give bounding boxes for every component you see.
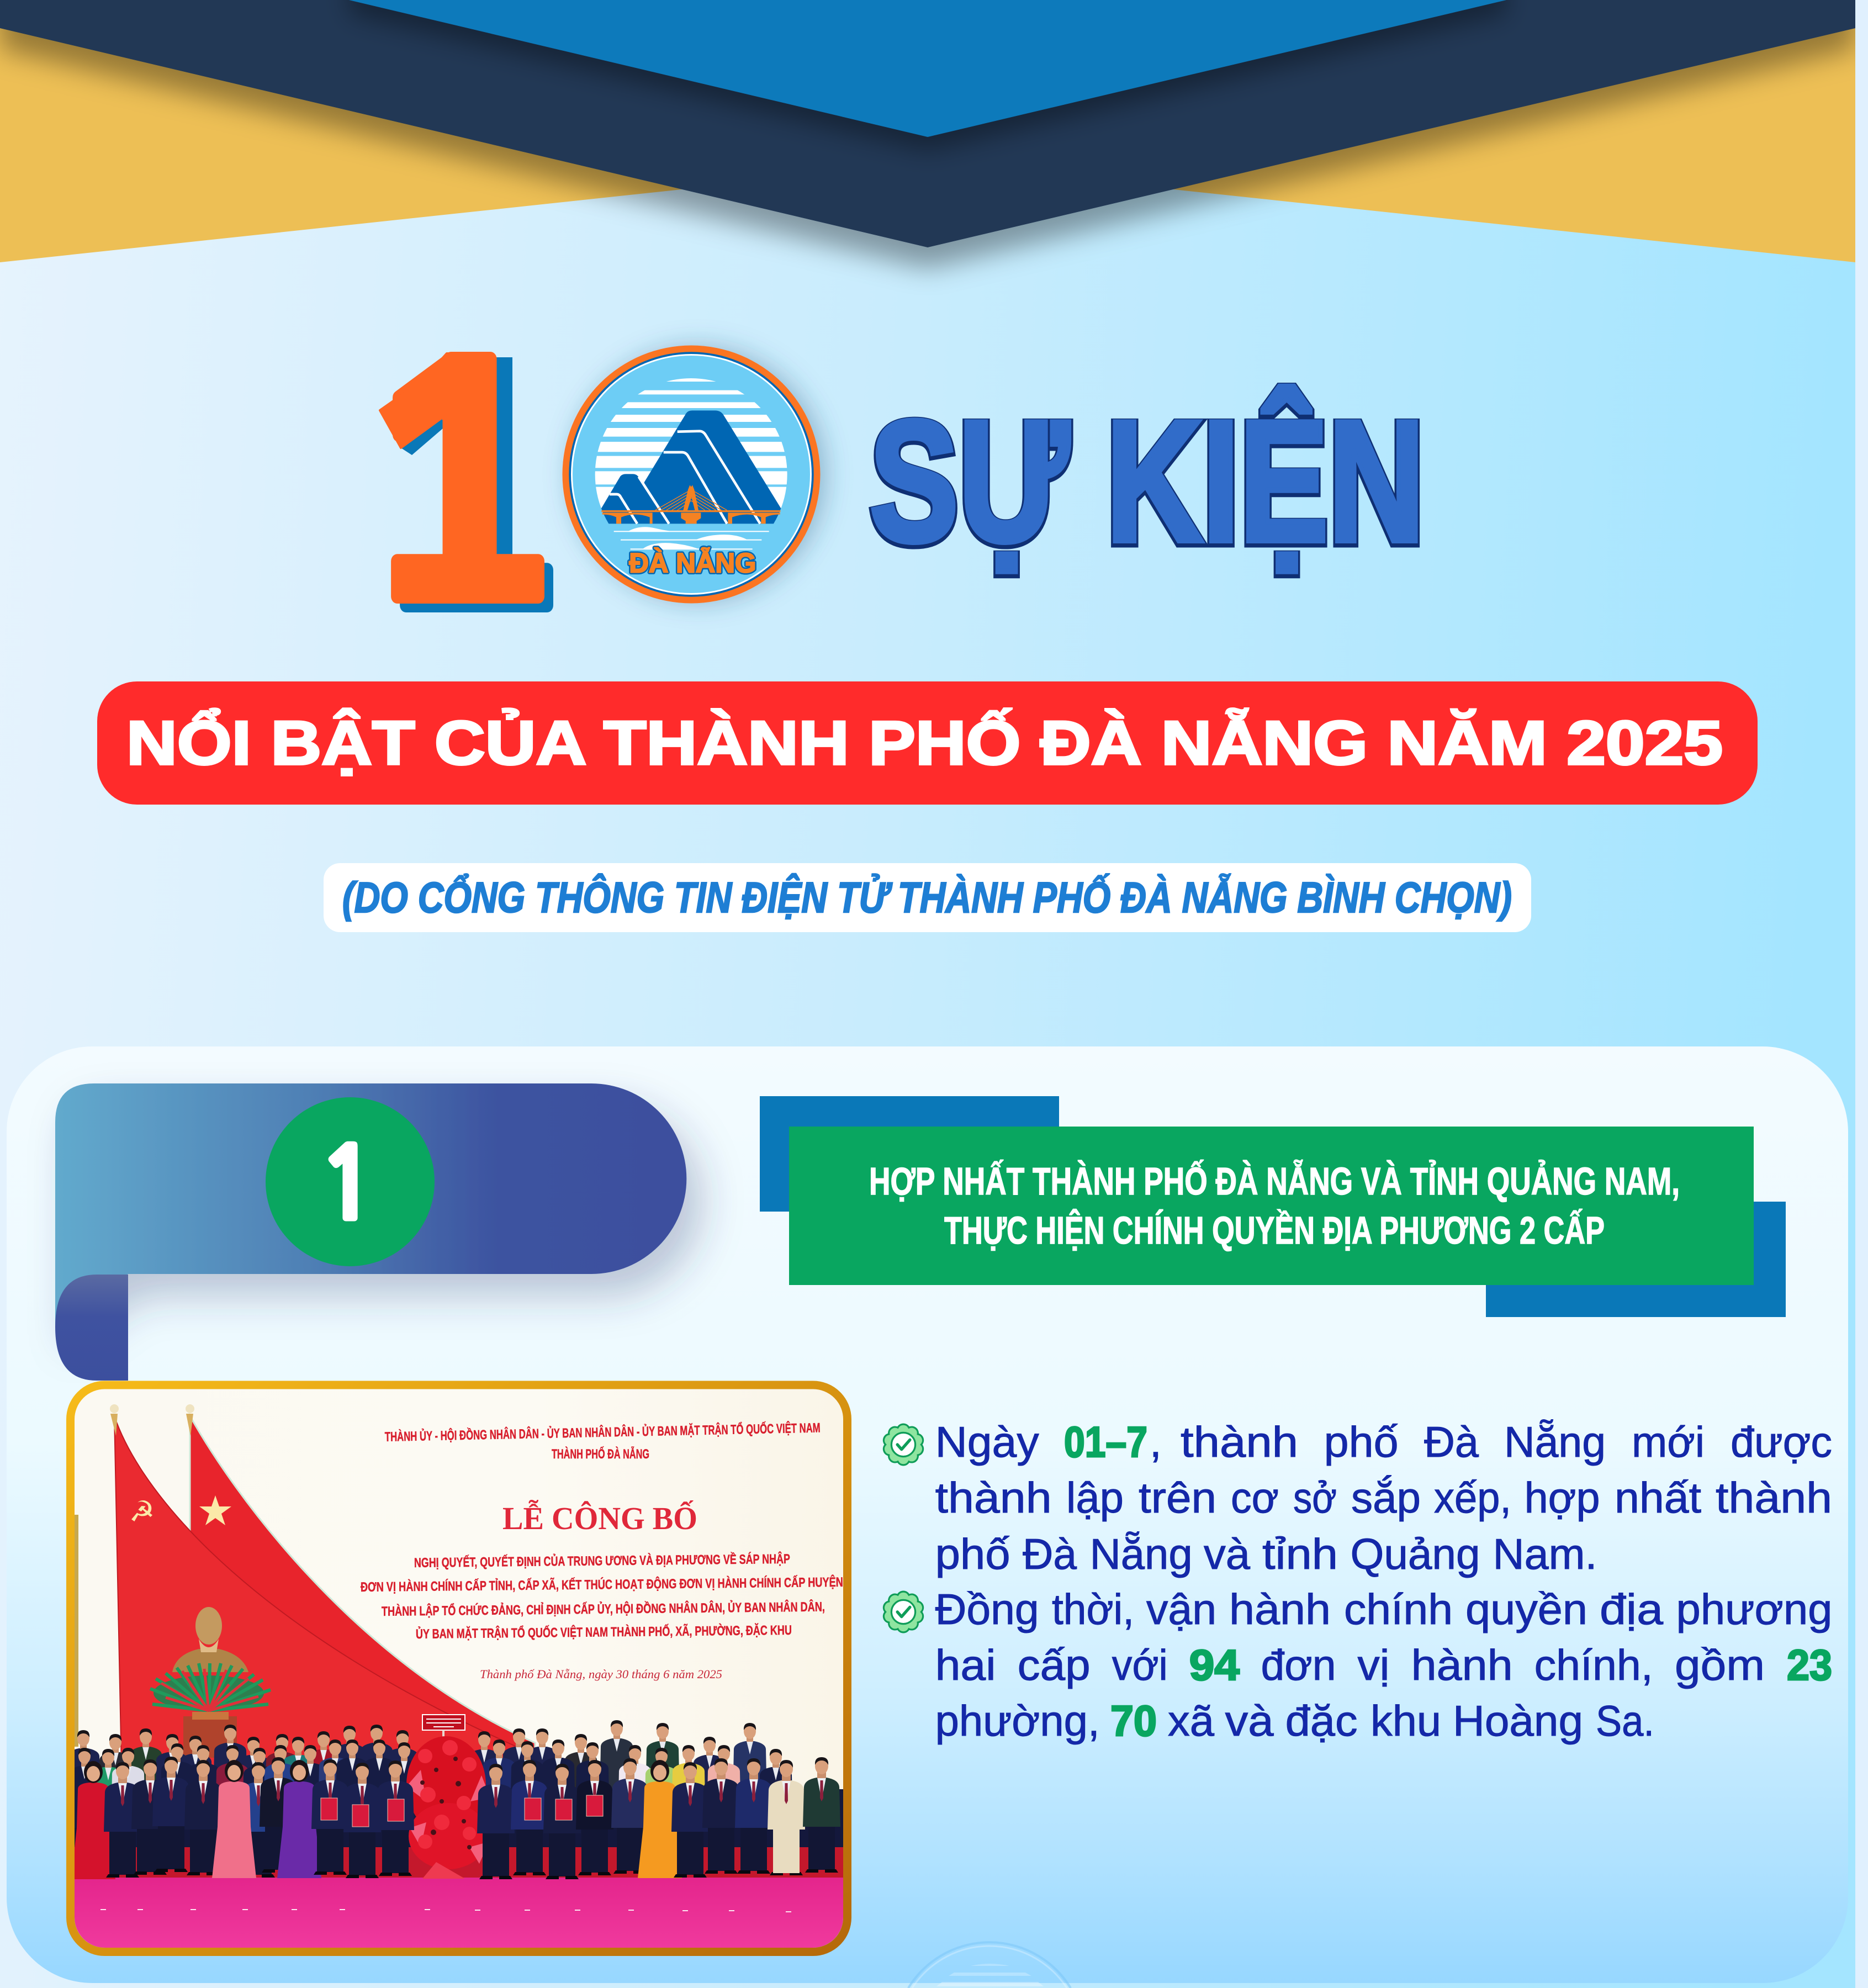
- line 4: [935, 1585, 1832, 1633]
- ceremony line 2: ĐƠN VỊ HÀNH CHÍNH CẤP TỈNH, CẤP XÃ, KẾT THÚC HOẠT ĐỘNG ĐƠN VỊ HÀNH CHÍNH CẤP HUYỆN: [361, 1574, 843, 1595]
- line 6: Hoàng: [1453, 1696, 1583, 1745]
- line 3: [935, 1530, 1597, 1578]
- line 3: Đà: [1023, 1530, 1077, 1578]
- ceremony line 3: THÀNH LẬP TỔ CHỨC ĐẢNG, CHỈ ĐỊNH CẤP ỦY, HỘI ĐỒNG NHÂN DÂN, ỦY BAN NHÂN DÂN,: [382, 1599, 825, 1619]
- line 6: 70: [1110, 1696, 1157, 1745]
- gold band right: [1137, 22, 1855, 262]
- number one flag depth: [401, 418, 443, 455]
- line 6: đặc: [1285, 1696, 1358, 1745]
- number one stem depth: [491, 357, 512, 578]
- line 2: xếp,: [1434, 1473, 1511, 1522]
- flag front: [114, 1416, 519, 1822]
- line 1: Đà: [1424, 1418, 1479, 1466]
- line 4: phương: [1676, 1585, 1832, 1633]
- line 6: [935, 1696, 1654, 1745]
- gold band left: [0, 22, 718, 262]
- line 6: phường,: [935, 1696, 1100, 1745]
- ceremony date: Thành phố Đà Nẵng, ngày 30 tháng 6 năm 2025: [480, 1667, 722, 1681]
- line 5: gồm: [1675, 1641, 1765, 1689]
- headline text: NỔI BẬT CỦA THÀNH PHỐ ĐÀ NẴNG NĂM 2025: [126, 709, 1723, 778]
- line 1: [935, 1418, 1832, 1466]
- heading line 2: THỰC HIỆN CHÍNH QUYỀN ĐỊA PHƯƠNG 2 CẤP: [944, 1208, 1605, 1252]
- bust statue: [172, 1607, 248, 1672]
- line 5: chính,: [1534, 1641, 1653, 1689]
- curtain pole: [75, 1515, 78, 1747]
- watermark logo at bottom: [908, 1942, 1071, 1988]
- subtitle text: (DO CỔNG THÔNG TIN ĐIỆN TỬ THÀNH PHỐ ĐÀ NẴNG BÌNH CHỌN): [342, 873, 1512, 922]
- banner sign: [422, 1715, 465, 1738]
- line 6: Sa.: [1596, 1696, 1654, 1745]
- line 2: [935, 1473, 1832, 1522]
- stage steps: [75, 1847, 843, 1879]
- number one face: 1: [378, 284, 547, 670]
- number circle: [266, 1097, 435, 1266]
- stage backdrop: [75, 1389, 843, 1886]
- bullet icon 1: [883, 1424, 923, 1465]
- bullet paragraph 2: [935, 1585, 1832, 1745]
- line 5: vị: [1357, 1641, 1389, 1689]
- blue chevron: [349, 0, 1506, 137]
- red headline banner: [97, 681, 1758, 805]
- flag star: [199, 1495, 231, 1525]
- army officer: [803, 1757, 840, 1873]
- line 5: 94: [1189, 1641, 1240, 1689]
- title outline: SỰ KIỆN: [870, 386, 1425, 579]
- line 2: thành: [1716, 1473, 1832, 1522]
- number: 1: [317, 1135, 378, 1234]
- line 4: địa: [1600, 1585, 1664, 1633]
- flower arrangement: [406, 1736, 490, 1879]
- flag back: [190, 1416, 535, 1822]
- ceremony line 1: NGHỊ QUYẾT, QUYẾT ĐỊNH CỦA TRUNG ƯƠNG VÀ ĐỊA PHƯƠNG VỀ SÁP NHẬP: [414, 1551, 790, 1571]
- back row of delegates: [66, 1720, 767, 1817]
- navy chevron: [0, 0, 1855, 247]
- line 1: mới: [1632, 1418, 1705, 1466]
- green heading panel: [789, 1127, 1754, 1285]
- line 3: Nam.: [1493, 1530, 1597, 1578]
- header text line 1: THÀNH ỦY - HỘI ĐỒNG NHÂN DÂN - ỦY BAN NHÂN DÂN - ỦY BAN MẶT TRẬN TỔ QUỐC VIỆT NAM: [385, 1419, 821, 1445]
- line 1: ,: [1150, 1418, 1162, 1466]
- logo ring blue: [569, 352, 814, 597]
- photo contents: [66, 1389, 843, 1949]
- line 6: khu: [1370, 1696, 1441, 1745]
- wordmark outline: ĐÀ NẴNG: [629, 548, 756, 579]
- number one depth shadow: 1: [387, 293, 555, 679]
- line 1: Ngày: [935, 1418, 1039, 1466]
- bullet icon 2: [883, 1592, 923, 1632]
- logo artwork: [589, 378, 791, 579]
- logo ring orange: [562, 346, 821, 603]
- line 2: cơ: [1231, 1473, 1279, 1522]
- flower planter: [150, 1663, 271, 1758]
- logo wordmark: [629, 548, 756, 579]
- line 1: Nẵng: [1504, 1418, 1606, 1466]
- river waves: [614, 527, 769, 549]
- panel card: [7, 1046, 1848, 1983]
- header text line 2: THÀNH PHỐ ĐÀ NẴNG: [552, 1446, 649, 1462]
- line 3: Quảng: [1351, 1530, 1480, 1578]
- pink carpet: [75, 1878, 843, 1949]
- line 4: vận: [1146, 1585, 1216, 1633]
- event heading box: [760, 1096, 1786, 1317]
- line 2: sở: [1293, 1473, 1337, 1522]
- title face: SỰ KIỆN: [870, 384, 1425, 578]
- bullet paragraph 1: [935, 1418, 1832, 1578]
- line 1: phố: [1324, 1418, 1399, 1466]
- line 2: trên: [1139, 1473, 1216, 1522]
- ceremony title: LỄ CÔNG BỐ: [502, 1500, 697, 1536]
- front row of delegates: [71, 1757, 840, 1879]
- sun stripes: [589, 378, 791, 508]
- line 1: thành: [1181, 1418, 1298, 1466]
- panel: event 1: [7, 1046, 1848, 1983]
- carpet highlights: [100, 1909, 791, 1912]
- line 5: đơn: [1261, 1641, 1336, 1689]
- crowd dark underlay: [75, 1789, 843, 1847]
- big number one: [378, 284, 555, 679]
- line 5: 23: [1787, 1641, 1832, 1689]
- line 4: quyền: [1465, 1585, 1587, 1633]
- line 5: với: [1112, 1641, 1168, 1689]
- photo frame: [66, 1385, 847, 1952]
- flag finials: [110, 1404, 194, 1436]
- wordmark face: ĐÀ NẴNG: [629, 548, 756, 579]
- ceremony line 4: ỦY BAN MẶT TRẬN TỔ QUỐC VIỆT NAM THÀNH PHỐ, XÃ, PHƯỜNG, ĐẶC KHU: [416, 1622, 792, 1642]
- ribbon roll: [55, 1275, 128, 1381]
- line 5: cấp: [1018, 1641, 1091, 1689]
- logo ring white: [571, 354, 812, 595]
- bridge: [601, 485, 780, 524]
- line 2: lập: [1066, 1473, 1124, 1522]
- police officer: [768, 1760, 805, 1875]
- line 5: hành: [1411, 1641, 1513, 1689]
- line 4: chính: [1344, 1585, 1453, 1633]
- line 2: nhất: [1615, 1473, 1701, 1522]
- line 4: Đồng: [935, 1585, 1039, 1633]
- line 5: hai: [935, 1641, 996, 1689]
- header banner: [0, 0, 1855, 262]
- line 6: xã: [1168, 1696, 1215, 1745]
- logo field: [573, 356, 810, 593]
- line 6: và: [1225, 1696, 1274, 1745]
- line 4: thời,: [1052, 1585, 1134, 1633]
- number one flag wedge: [380, 353, 458, 448]
- middle row of delegates: [67, 1739, 793, 1829]
- line 3: phố: [935, 1530, 1010, 1578]
- red document folders: [321, 1795, 603, 1827]
- line 1: được: [1731, 1418, 1832, 1466]
- line 2: hợp: [1525, 1473, 1600, 1522]
- hammer and sickle: ☭: [129, 1495, 155, 1529]
- line 3: tỉnh: [1262, 1530, 1338, 1578]
- line 5: [935, 1641, 1832, 1689]
- photo border: [71, 1385, 847, 1952]
- ribbon main: [55, 1083, 686, 1328]
- title: SU KIEN: [870, 384, 1425, 579]
- Da Nang logo emblem: [562, 346, 821, 603]
- white pill: [324, 863, 1531, 932]
- red pill: [97, 681, 1758, 805]
- blue offset block bottom: [1486, 1202, 1786, 1317]
- subtitle pill: [324, 863, 1531, 932]
- line 4: hành: [1229, 1585, 1331, 1633]
- blue offset block top: [760, 1096, 1059, 1212]
- line 1: 01–7: [1064, 1418, 1147, 1466]
- line 3: và: [1204, 1530, 1251, 1578]
- line 3: Nẵng: [1090, 1530, 1193, 1578]
- line 2: thành: [935, 1473, 1052, 1522]
- line 2: sắp: [1351, 1473, 1421, 1522]
- mountains: [601, 410, 781, 524]
- ribbon number tag: [55, 1083, 686, 1381]
